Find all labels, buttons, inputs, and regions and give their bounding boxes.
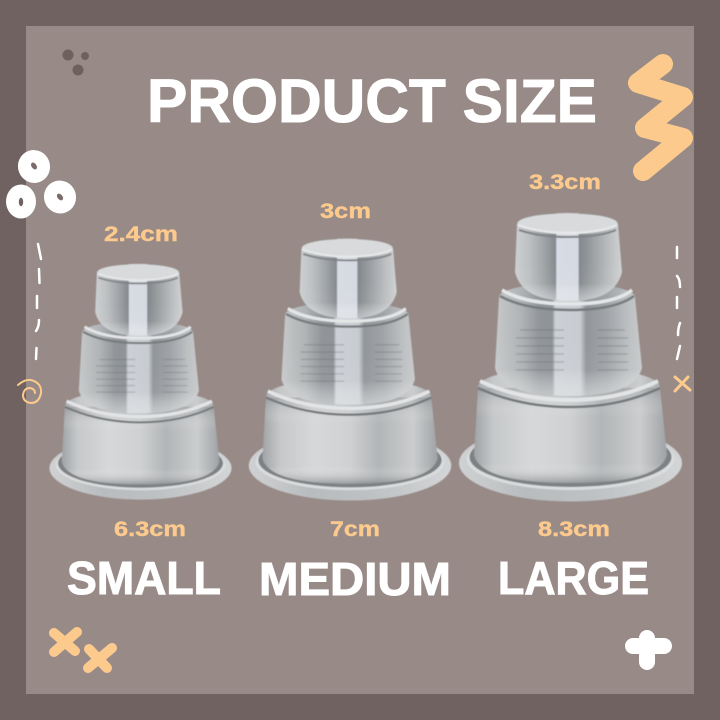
icon: white plus (633, 638, 664, 662)
height label medium: 3cm (320, 200, 371, 223)
width label small: 6.3cm (114, 518, 186, 541)
icon: right dashed line (677, 247, 680, 359)
large cake pan (459, 213, 682, 502)
small cake pan (49, 264, 232, 500)
icon: orange squiggle (638, 64, 683, 171)
height label large: 3.3cm (529, 171, 601, 194)
icon: two orange crosses (54, 632, 112, 668)
width label large: 8.3cm (538, 518, 610, 541)
height label small: 2.4cm (104, 223, 178, 246)
width label medium: 7cm (330, 518, 380, 541)
icon: three dots (62, 50, 89, 76)
icon: small orange cross (675, 377, 690, 391)
size name small: SMALL (67, 552, 221, 604)
icon: left dashed line (36, 244, 41, 359)
icon: orange spiral (18, 380, 41, 403)
size name medium: MEDIUM (259, 553, 451, 605)
icon: white rings (6, 146, 81, 218)
size name large: LARGE (498, 552, 649, 604)
title: PRODUCT SIZE (147, 67, 597, 135)
medium cake pan (249, 239, 451, 501)
